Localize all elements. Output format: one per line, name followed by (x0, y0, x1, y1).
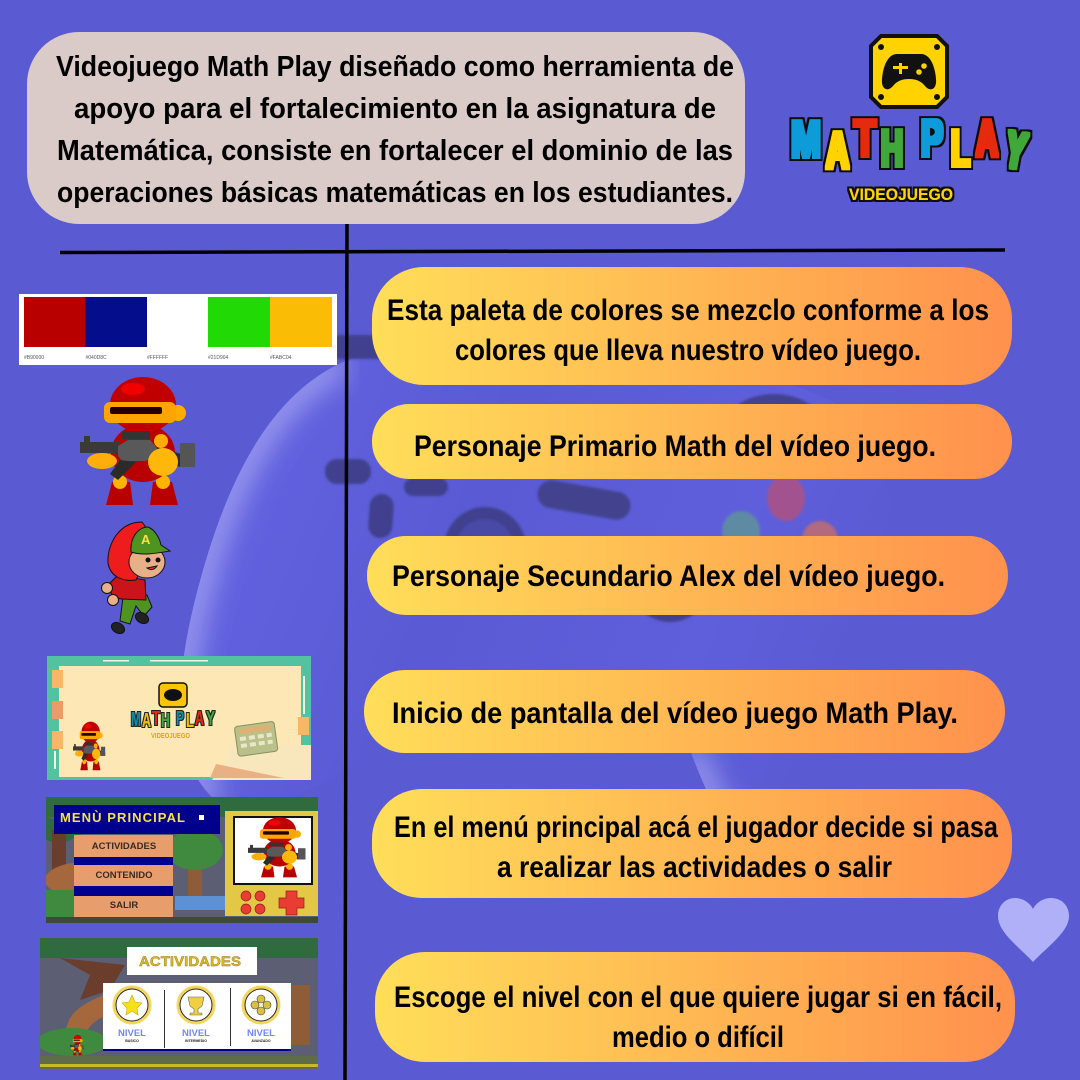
description: levels: medio o difícil (612, 1021, 784, 1054)
background game controller (184, 334, 840, 797)
mini logo: H (161, 710, 170, 732)
mini logo: VIDEOJUEGO (151, 733, 190, 740)
description: color palette: Esta paleta de colores se mezclo conforme a los (387, 294, 989, 327)
header text panel: Matemática, consiste en fortalecer el dominio de las (57, 135, 733, 167)
screenshot: activities levels: INTERMEDIO (185, 1039, 207, 1043)
screenshot: main menu: MENÙ PRINCIPAL (60, 810, 185, 825)
character: Alex: A (141, 532, 151, 547)
mini logo: T (152, 708, 160, 730)
screenshot: activities levels: BASICO (125, 1039, 139, 1043)
logo wordmark: Y (1001, 121, 1031, 181)
color palette: #040D8C (86, 355, 107, 361)
screenshot: activities levels: NIVEL (118, 1028, 146, 1039)
logo subtitle: VIDEOJUEGO (849, 185, 953, 204)
description: secondary character: Personaje Secundario Alex del vídeo juego. (392, 560, 945, 593)
mini logo: P (176, 708, 184, 730)
logo wordmark: P (921, 110, 943, 168)
description: primary character (372, 404, 1012, 479)
logo wordmark (791, 110, 1031, 181)
description: levels: Escoge el nivel con el que quiere jugar si en fácil, (394, 981, 1002, 1014)
header text panel (27, 32, 745, 224)
screenshot: activities levels: NIVEL (247, 1028, 275, 1039)
header text panel: operaciones básicas matemáticas en los estudiantes. (57, 177, 733, 209)
logo wordmark: A (826, 122, 849, 180)
logo wordmark: T (854, 110, 876, 168)
mini logo (131, 683, 215, 740)
description: start screen (364, 670, 1005, 753)
mini logo: M (131, 709, 141, 731)
header text panel: apoyo para el fortalecimiento en la asignatura de (74, 93, 716, 125)
description: secondary character (367, 536, 1008, 615)
character: Math robot (80, 377, 195, 505)
screenshot: main menu: ACTIVIDADES (92, 841, 156, 852)
logo wordmark: A (976, 110, 998, 168)
mini logo: L (186, 710, 194, 732)
logo wordmark: M (791, 111, 821, 169)
screenshot: activities levels (37, 938, 318, 1069)
divider lines (60, 224, 1005, 1080)
description: start screen: Inicio de pantalla del vídeo juego Math Play. (392, 697, 958, 730)
mini logo: A (195, 708, 204, 730)
description: color palette: colores que lleva nuestro vídeo juego. (455, 334, 921, 367)
logo: Math Play (791, 36, 1031, 204)
logo wordmark: L (951, 120, 970, 178)
screenshot: main menu: CONTENIDO (96, 870, 152, 881)
screenshot: main menu (45, 797, 318, 923)
color palette: #FABC04 (270, 355, 292, 361)
character: Alex (102, 522, 170, 636)
description: color palette (372, 267, 1012, 385)
screenshot: activities levels: AVANZADO (251, 1039, 271, 1043)
mini logo: Y (206, 708, 215, 730)
screenshot: activities levels: NIVEL (182, 1028, 210, 1039)
header text panel: Videojuego Math Play diseñado como herramienta de (56, 51, 734, 83)
color palette (19, 294, 337, 365)
icon: gamepad badge (871, 36, 947, 107)
icon: heart (998, 898, 1069, 962)
screenshot: activities levels: ACTIVIDADES (139, 953, 241, 969)
screenshot: start screen (47, 656, 311, 780)
description: levels (375, 952, 1015, 1062)
color palette: #FFFFFF (147, 355, 168, 361)
description: primary character: Personaje Primario Math del vídeo juego. (414, 430, 936, 463)
screenshot: main menu: SALIR (110, 900, 138, 911)
color palette: #21D904 (208, 355, 229, 361)
description: main menu: a realizar las actividades o salir (497, 851, 892, 884)
color palette: #B90000 (24, 355, 44, 361)
mini logo: A (142, 710, 151, 732)
description: main menu (372, 789, 1012, 898)
logo wordmark: H (881, 120, 903, 178)
